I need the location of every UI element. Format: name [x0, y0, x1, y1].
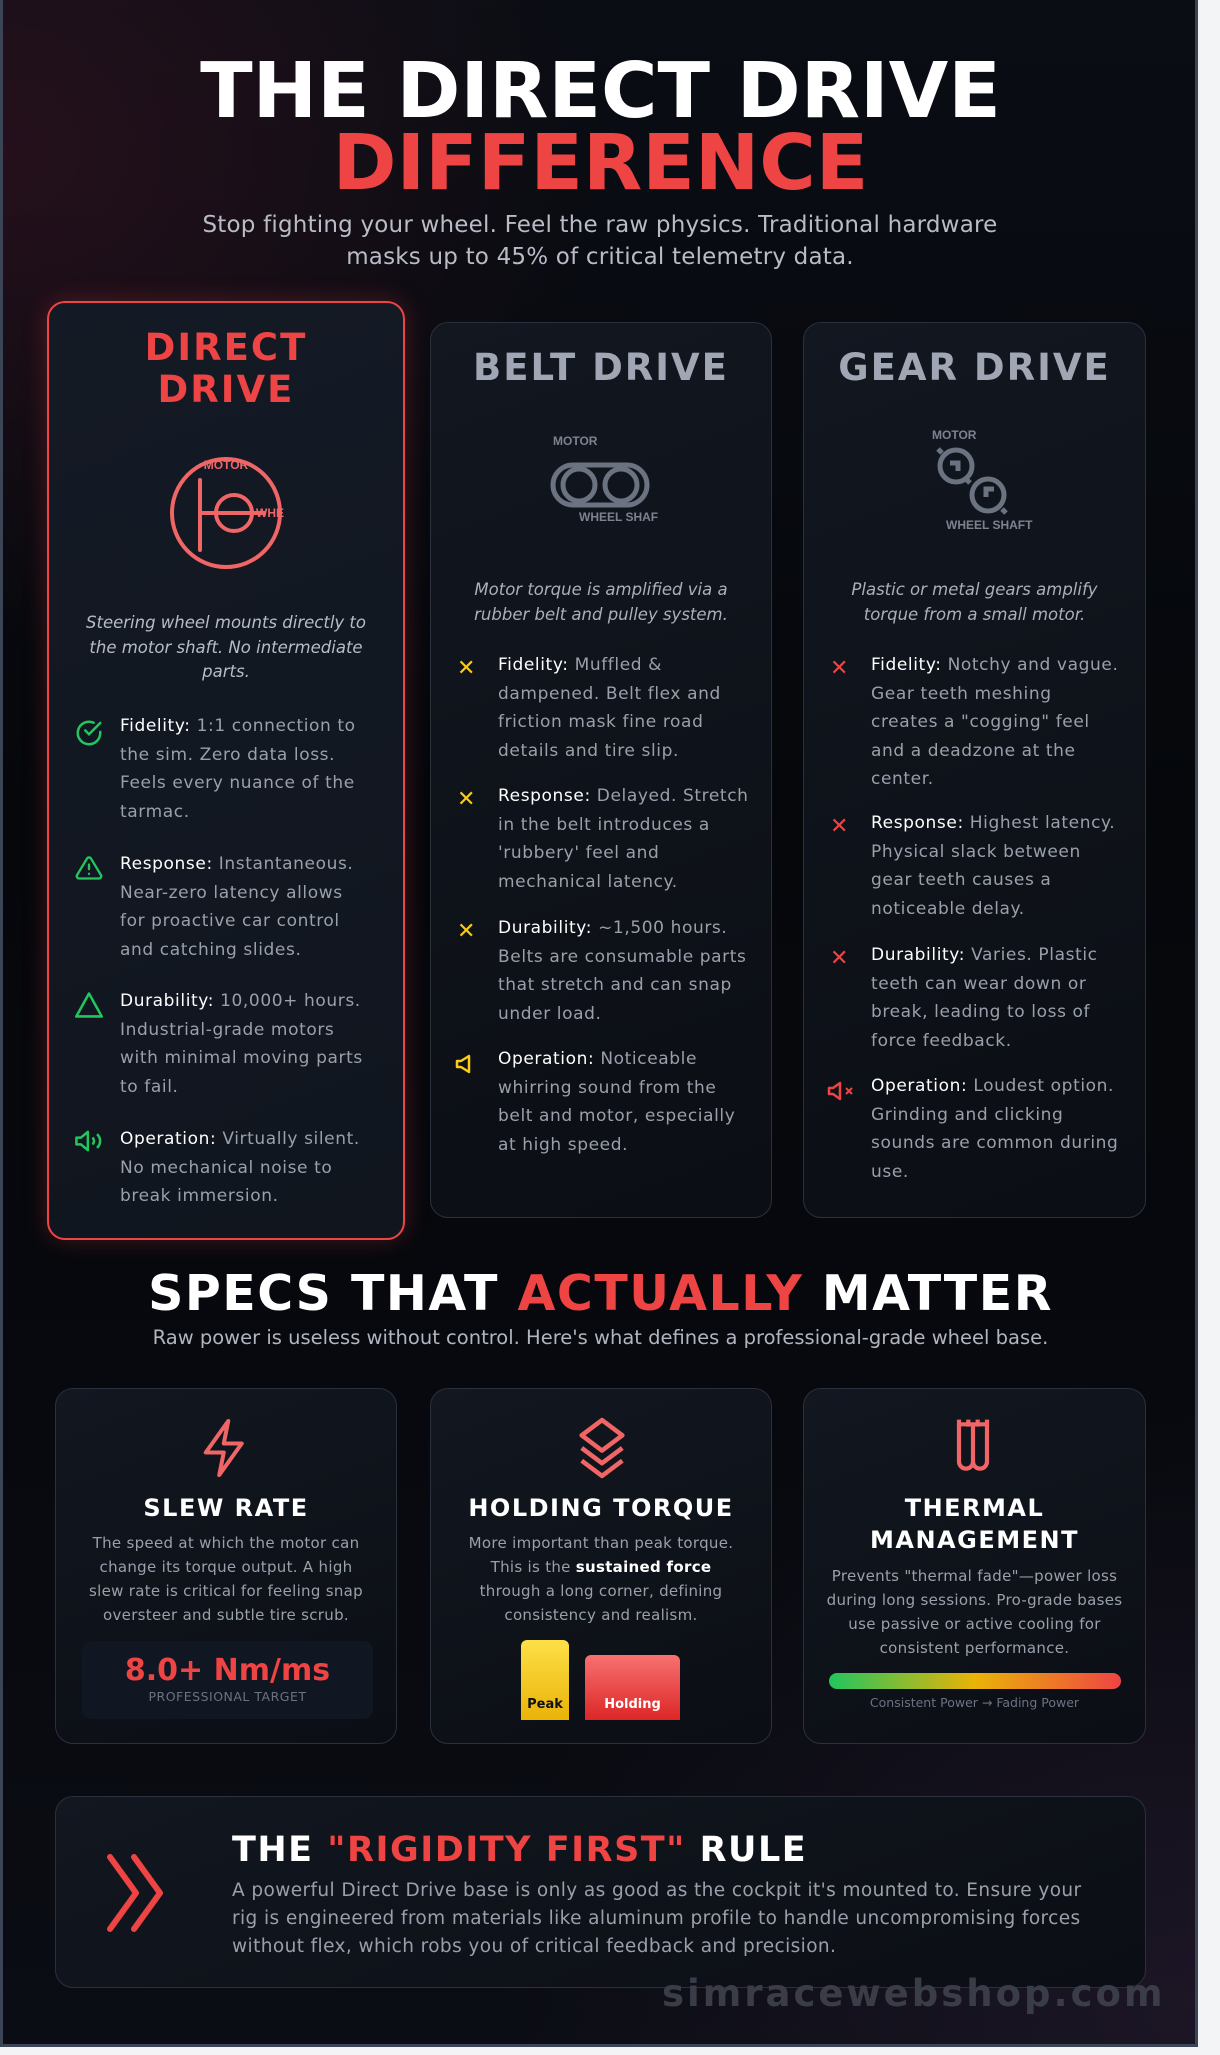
bar chart: peak vs holding	[521, 1640, 680, 1720]
description: direct drive: Steering wheel mounts directly to the motor shaft. No intermediate parts.	[86, 613, 366, 681]
item: durability: Durability: 10,000+ hours. Industrial-grade motors with minimal moving parts to fail.	[120, 991, 363, 1096]
icon: direct drive motor: MOTOR	[204, 458, 249, 472]
title: slew rate: SLEW RATE	[143, 1494, 309, 1522]
item: fidelity: Fidelity: 1:1 connection to the sim. Zero data loss. Feels every nuance of the tarmac.	[120, 716, 356, 822]
icon: x yellow: ✕	[457, 656, 475, 681]
icon: speaker	[75, 1130, 102, 1152]
icon: lightning	[204, 1419, 244, 1477]
stat box: PROFESSIONAL TARGET	[148, 1689, 306, 1704]
title: holding torque: HOLDING TORQUE	[468, 1494, 734, 1522]
icon: muted speaker	[828, 1082, 853, 1100]
icon: layers	[579, 1418, 625, 1478]
icon: belt	[550, 434, 658, 523]
heading: specs: SPECS THAT ACTUALLY MATTER	[148, 1265, 1053, 1322]
panel: slew rate	[55, 1388, 397, 1744]
title: thermal management	[870, 1494, 1079, 1554]
icon: gears: WHEEL SHAFT	[946, 518, 1033, 532]
bar chart: peak vs holding: Peak	[527, 1697, 563, 1712]
title: DIFFERENCE	[333, 119, 868, 208]
heading: belt drive: BELT DRIVE	[473, 346, 729, 389]
stat box: 8.0+ Nm/ms	[125, 1653, 330, 1688]
item: operation: Operation: Virtually silent. No mechanical noise to break immersion.	[120, 1129, 360, 1206]
icon: x red: ✕	[830, 814, 848, 839]
heading: direct drive	[145, 326, 307, 411]
icon: x red: ✕	[830, 946, 848, 971]
panel: belt drive	[430, 322, 772, 1218]
text: rigidity: A powerful Direct Drive base is only as good as the cockpit it's mounted to. Ensure your rig is engineered from materials like aluminum profile to handle uncompromising forces without flex, which robs you of critical feedback and precision.	[232, 1880, 1082, 1957]
item: operation: Operation: Loudest option. Grinding and clicking sounds are common during use.	[871, 1076, 1118, 1182]
icon: x yellow: ✕	[457, 919, 475, 944]
item: fidelity: Fidelity: Notchy and vague. Gear teeth meshing creates a "cogging" feel and a deadzone at the center.	[871, 655, 1118, 789]
title: thermal management: THERMAL	[905, 1494, 1044, 1522]
item: response: Response: Highest latency. Physical slack between gear teeth causes a noticeable delay.	[871, 813, 1115, 918]
bar chart: peak vs holding: Holding	[604, 1697, 661, 1712]
title	[200, 47, 1001, 208]
icon: chevrons	[107, 1854, 163, 1932]
item: durability: Durability: Varies. Plastic teeth can wear down or break, leading to loss of force feedback.	[871, 945, 1098, 1050]
panel: direct drive	[47, 301, 405, 1240]
icon: warning	[76, 856, 102, 880]
panel: rigidity first rule	[55, 1796, 1146, 1988]
text: thermal management: Prevents "thermal fade"—power loss during long sessions. Pro-grade bases use passive or active cooling for consistent performance.	[827, 1567, 1122, 1657]
description: gear drive: Plastic or metal gears amplify torque from a small motor.	[851, 580, 1098, 624]
icon: check	[76, 720, 102, 746]
item: response: Response: Delayed. Stretch in the belt introduces a 'rubbery' feel and mechanical latency.	[498, 786, 749, 892]
gradient bar	[829, 1673, 1121, 1689]
icon: x yellow: ✕	[457, 787, 475, 812]
subtitle: Stop fighting your wheel. Feel the raw physics. Traditional hardware masks up to 45% of critical telemetry data.	[202, 212, 998, 270]
heading: gear drive: GEAR DRIVE	[838, 346, 1111, 389]
heading: direct drive: DRIVE	[158, 368, 294, 411]
icon: belt: MOTOR	[553, 434, 598, 448]
heading: rigidity: THE "RIGIDITY FIRST" RULE	[232, 1830, 807, 1870]
panel: thermal management	[803, 1388, 1146, 1744]
item: fidelity: Fidelity: Muffled & dampened. Belt flex and friction mask fine road details and tire slip.	[498, 655, 721, 760]
icon: x red: ✕	[830, 656, 848, 681]
icon: direct drive motor	[170, 457, 284, 569]
subtitle: specs: Raw power is useless without control. Here's what defines a professional-grade wheel base.	[153, 1326, 1048, 1349]
item: durability: Durability: ~1,500 hours. Belts are consumable parts that stretch and can snap under load.	[498, 918, 746, 1024]
watermark: simracewebshop.com	[662, 1972, 1166, 2015]
icon: gears: MOTOR	[932, 428, 977, 442]
icon: speaker yellow	[456, 1054, 470, 1074]
text: holding torque: More important than peak torque. This is the sustained force through a long corner, defining consistency and realism.	[469, 1534, 733, 1624]
item: operation: Operation: Noticeable whirring sound from the belt and motor, especially at high speed.	[498, 1049, 735, 1154]
icon: gears	[932, 428, 1033, 532]
description: belt drive: Motor torque is amplified via a rubber belt and pulley system.	[474, 580, 728, 624]
icon: thermal	[956, 1420, 990, 1471]
stat box	[82, 1641, 373, 1719]
item: response: Response: Instantaneous. Near-zero latency allows for proactive car control and catching slides.	[120, 854, 353, 960]
panel: gear drive	[803, 322, 1146, 1218]
panel: holding torque	[430, 1388, 772, 1744]
caption: gradient bar: Consistent Power → Fading Power	[870, 1695, 1079, 1710]
heading: direct drive: DIRECT	[145, 326, 307, 369]
text: slew rate: The speed at which the motor can change its torque output. A high slew rate is critical for feeling snap oversteer and subtle tire scrub.	[89, 1534, 363, 1624]
title: THE DIRECT DRIVE	[200, 47, 1001, 136]
title: thermal management: MANAGEMENT	[870, 1526, 1079, 1554]
icon: triangle	[75, 992, 103, 1018]
